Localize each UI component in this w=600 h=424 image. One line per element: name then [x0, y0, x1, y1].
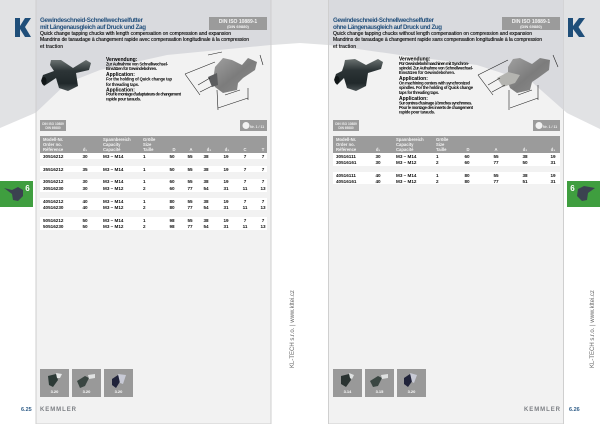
rows: left: 31	[223, 186, 229, 191]
rows: left	[43, 154, 266, 229]
rows: right: 40	[375, 179, 381, 184]
logo: right K	[568, 18, 585, 37]
subtitle: left: et traction	[40, 44, 63, 50]
rows: right: 19	[550, 154, 556, 159]
rows: left: M3 – M12	[103, 205, 124, 210]
rows: left: M3 – M14	[103, 154, 124, 159]
rows: left: M3 – M14	[103, 218, 124, 223]
standard badge: left	[209, 17, 267, 30]
table header: right: Taille	[436, 147, 447, 152]
buttons: left: DIN 69880	[45, 126, 61, 130]
accessory thumbnails: right: 3.14	[344, 389, 352, 394]
usage text: right	[399, 56, 474, 114]
rows: left: 80	[169, 205, 175, 210]
rows: left: 7	[244, 167, 247, 172]
buttons: right: DIN 69880	[338, 126, 354, 130]
rows: left: 1	[143, 167, 146, 172]
usage text: right: spindel. Zur Aufnahme von Schnellwechsel-	[399, 66, 474, 70]
rows: left: M3 – M14	[103, 167, 124, 172]
standard badge: right	[502, 17, 560, 30]
usage text: left: rapide pour tarauds.	[106, 96, 141, 102]
table header: right: d₂	[523, 147, 527, 152]
rows: left: 2	[143, 186, 146, 191]
table header: right: A	[494, 147, 498, 152]
table header: right: Größe	[436, 137, 449, 142]
background swoosh	[0, 0, 600, 129]
usage text: right: rapide pour tarauds.	[399, 110, 435, 114]
rows: left: 50	[169, 167, 175, 172]
rows: right: M3 – M14	[396, 154, 417, 159]
section tab: left: 6	[25, 184, 30, 193]
rows: right: 77	[493, 160, 499, 165]
usage text: left: Verwendung:	[106, 57, 138, 63]
rows: right: 30516161	[336, 160, 357, 165]
rows: left: 40	[82, 205, 88, 210]
accessory thumbnails: right: 3.15	[376, 389, 384, 394]
rows: right: M3 – M12	[396, 179, 417, 184]
rows: right: 40516161	[336, 179, 357, 184]
rows: left: 11	[243, 205, 248, 210]
rows: left: 54	[203, 224, 209, 229]
rows: right: 38	[522, 154, 528, 159]
usage text: left: Application:	[106, 72, 135, 78]
rows: left: M3 – M12	[103, 224, 124, 229]
rows: left: 13	[260, 224, 266, 229]
table header: left: D	[172, 147, 176, 152]
side text: right: KL-TECH s.r.o. | www.kltei.cz	[590, 290, 596, 368]
standard badge: left: (DIN 69880)	[227, 24, 250, 29]
rows: left: 30516212	[43, 179, 64, 184]
table header: left: Taille	[143, 147, 154, 152]
rows: left: 19	[223, 167, 229, 172]
buttons: right: Nr. 1 / 11	[543, 125, 557, 129]
section tab: right	[567, 181, 600, 207]
rows: left: 50	[169, 154, 175, 159]
table header: right: Référence	[336, 147, 357, 152]
rows: right: M3 – M14	[396, 173, 417, 178]
rows: right: 31	[550, 179, 556, 184]
rows: left: 1	[143, 218, 146, 223]
rows: right: 40516111	[336, 173, 356, 178]
rows: left: 2	[143, 224, 146, 229]
rows: left: 40516230	[43, 205, 64, 210]
rows: left: 30516212	[43, 154, 64, 159]
rows: left: M3 – M14	[103, 199, 124, 204]
accessory thumbnails: right	[333, 369, 426, 397]
rows: left: 7	[262, 179, 265, 184]
rows: right: M3 – M12	[396, 160, 417, 165]
table header: right: Modell-Nr.	[336, 137, 356, 142]
rows: right: 1	[436, 173, 439, 178]
table header: right: D	[466, 147, 470, 152]
table header: right: Size	[436, 142, 445, 147]
table header: left	[40, 136, 267, 153]
side text: left: KL-TECH s.r.o. | www.kltei.cz	[290, 290, 296, 368]
rows: left: 55	[187, 154, 193, 159]
table: right	[333, 136, 560, 184]
rows: left: 38	[203, 179, 209, 184]
accessory thumbnails: left: 3.20	[51, 389, 59, 394]
table header: left: Order no.	[43, 142, 62, 147]
rows: right	[336, 154, 556, 184]
heading: left: Gewindeschneid-Schnellwechselfutter	[40, 17, 144, 24]
table header: right: Capacité	[396, 147, 414, 152]
heading: right: ohne Längenausgleich auf Druck und Zug	[333, 24, 442, 31]
rows: left: 30	[82, 186, 88, 191]
table header: right	[333, 136, 560, 153]
table: left	[40, 136, 267, 230]
usage text: left: Application:	[106, 88, 135, 94]
rows: left: 50	[82, 224, 88, 229]
table header: left: C	[243, 147, 247, 152]
rows: right: 77	[493, 179, 499, 184]
rows: left: 13	[260, 186, 266, 191]
rows: left: 98	[169, 224, 175, 229]
usage text: left: Pour le montage d'adaptateurs de changement	[106, 92, 182, 96]
subtitle: left: Mandrins de taraudage à changement rapide avec compensation longitudinale à la compression	[40, 37, 249, 43]
panel: left page	[36, 0, 271, 424]
table header: left: Référence	[43, 147, 64, 152]
heading: right: Gewindeschneid-Schnellwechselfutter	[333, 17, 435, 24]
subtitle: left: Quick change tapping chucks with length compensation on compression and expansion	[40, 31, 231, 37]
accessory thumbnails: left: 3.20	[83, 389, 91, 394]
section tab: right: 6	[570, 184, 575, 193]
table header: right: Order no.	[336, 142, 355, 147]
rows: left: 54	[203, 186, 209, 191]
rows: right: 30	[375, 154, 381, 159]
accessory thumbnails: left: 3.20	[115, 389, 123, 394]
rows: left: 11	[243, 224, 248, 229]
subtitle: right: et traction	[333, 44, 356, 50]
rows: right: 50	[522, 160, 528, 165]
usage text: right: Application:	[399, 96, 428, 102]
section tab: left	[0, 181, 33, 207]
rows: left: 13	[260, 205, 266, 210]
rows: left: 2	[143, 205, 146, 210]
rows: left: 55	[187, 218, 193, 223]
table header: left: Spannbereich	[103, 137, 131, 142]
rows: left: 38	[203, 167, 209, 172]
table header: right: d₃	[551, 147, 555, 152]
buttons: left: DIN ISO 10889	[42, 122, 64, 126]
usage text: right: Sur centres d'usinage à broches synchrones.	[399, 100, 472, 106]
rows: right: 51	[522, 179, 528, 184]
usage text: left: for threading taps.	[106, 82, 139, 87]
rows: left: M3 – M12	[103, 186, 124, 191]
rows: left: 7	[244, 154, 247, 159]
page number: left: 6.25	[21, 407, 32, 413]
technical drawing: right	[478, 55, 558, 110]
subtitle: left	[40, 31, 249, 50]
rows: left: 19	[223, 179, 229, 184]
table header: left: A	[189, 147, 193, 152]
rows: left: 7	[244, 199, 247, 204]
subtitle: right: Mandrins de taraudage à changement rapide sans compensation longitudinale à la compression	[333, 37, 542, 43]
rows: right: 55	[493, 173, 499, 178]
technical drawing: left	[185, 52, 263, 110]
table header: left: d₃	[225, 147, 229, 152]
table header: left: d₁	[83, 147, 87, 152]
rows: left: 60	[169, 186, 175, 191]
buttons: left: Nr. 1 / 11	[250, 125, 264, 129]
logo: left K	[15, 18, 31, 37]
buttons: left	[40, 120, 267, 131]
rows: left: 40	[82, 199, 88, 204]
usage text: right: taps for threading taps.	[399, 90, 439, 95]
rows: left: 55	[187, 199, 193, 204]
standard badge: left: DIN ISO 10889-1	[219, 19, 257, 25]
rows: left: 50516230	[43, 224, 64, 229]
rows: right: 80	[464, 173, 470, 178]
page number: right: 6.26	[569, 407, 580, 413]
rows: left: 1	[143, 154, 146, 159]
table header: left: T	[262, 147, 265, 152]
heading: left	[40, 17, 146, 31]
table header: left: Größe	[143, 137, 156, 142]
usage text: right: Einsätzen für Gewindebohren.	[399, 70, 455, 75]
rows: right: 80	[464, 179, 470, 184]
footer brand: left: KEMMLER	[40, 407, 77, 413]
usage text: right: Pour le montage des inserts de changement	[399, 105, 474, 110]
rows: left: 38	[203, 199, 209, 204]
rows: left: 80	[169, 199, 175, 204]
rows: left: 35516212	[43, 167, 64, 172]
rows: left: 50	[82, 218, 88, 223]
rows: left: 77	[187, 186, 193, 191]
rows: left: 40516212	[43, 199, 64, 204]
usage text: right: Verwendung:	[399, 56, 431, 62]
rows: right: 55	[493, 154, 499, 159]
usage text: left: For the holding of Quick change tap	[106, 76, 172, 82]
standard badge: right: DIN ISO 10889-1	[512, 19, 550, 25]
rows: left: 1	[143, 179, 146, 184]
rows: right: 60	[464, 154, 470, 159]
rows: left: 30516230	[43, 186, 64, 191]
rows: right: 38	[522, 173, 528, 178]
rows: left: 77	[187, 224, 193, 229]
rows: left: 1	[143, 199, 146, 204]
rows: left: 35	[82, 167, 88, 172]
usage text: right: On machining centers with synchronized	[399, 80, 470, 86]
rows: left: 38	[203, 154, 209, 159]
table header: left: d₂	[207, 147, 211, 152]
rows: left: 50516212	[43, 218, 64, 223]
rows: right: 30	[375, 160, 381, 165]
table header: right: d₁	[376, 147, 380, 152]
table header: left: Size	[143, 142, 152, 147]
usage text: right: Für Gewindebohrmaschinen mit Synchron-	[399, 61, 470, 66]
accessory thumbnails: right: 3.20	[408, 389, 416, 394]
usage text: left	[106, 57, 182, 102]
rows: right: 31	[550, 160, 556, 165]
accessory thumbnails: left	[40, 369, 133, 397]
rows: left: M3 – M14	[103, 179, 124, 184]
usage text: left: Zur Aufnahme von Schnellwechsel-	[106, 62, 169, 66]
rows: left: 30	[82, 154, 88, 159]
rows: right: 1	[436, 154, 439, 159]
rows: right: 40	[375, 173, 381, 178]
rows: left: 7	[244, 218, 247, 223]
footer brand: right: KEMMLER	[524, 407, 561, 413]
rows: left: 55	[187, 167, 193, 172]
rows: left: 31	[223, 224, 229, 229]
rows: left: 38	[203, 218, 209, 223]
table header: left: Capacity	[103, 142, 121, 147]
rows: right: 2	[436, 179, 439, 184]
heading: left: mit Längenausgleich auf Druck und Zag	[40, 24, 146, 31]
rows: right: 2	[436, 160, 439, 165]
rows: left: 54	[203, 205, 209, 210]
subtitle: right	[333, 31, 542, 50]
rows: left: 7	[244, 179, 247, 184]
rows: left: 98	[169, 218, 175, 223]
buttons: right: DIN ISO 10889	[335, 122, 357, 126]
heading: right	[333, 17, 442, 31]
standard badge: right: (DIN 69880)	[520, 24, 543, 29]
rows: left: 7	[262, 199, 265, 204]
subtitle: right: Quick change tapping chucks without length compensation on compression and expansion	[333, 31, 532, 37]
table header: left: Capacité	[103, 147, 121, 152]
rows: left: 31	[223, 205, 229, 210]
buttons: right	[333, 120, 560, 131]
usage text: right: Application:	[399, 76, 428, 82]
rows: left: 19	[223, 218, 229, 223]
table header: right: Capacity	[396, 142, 414, 147]
table header: left: Modell-Nr.	[43, 137, 63, 142]
rows: left: 77	[187, 205, 193, 210]
rows: left: 19	[223, 199, 229, 204]
product photo: right	[334, 59, 383, 91]
rows: left: 60	[169, 179, 175, 184]
rows: right: 60	[464, 160, 470, 165]
rows: left: 7	[262, 154, 265, 159]
rows: left: 19	[223, 154, 229, 159]
rows: left: 30	[82, 179, 88, 184]
table header: right: Spannbereich	[396, 137, 424, 142]
rows: right: 30516111	[336, 154, 356, 159]
panel: right page	[328, 0, 564, 424]
rows: left: 11	[243, 186, 248, 191]
rows: left: 7	[262, 218, 265, 223]
rows: right: 19	[550, 173, 556, 178]
usage text: left: Einsätzen für Gewindebohren.	[106, 66, 157, 71]
rows: left: 7	[262, 167, 265, 172]
usage text: right: spindles. For the holding of Quick change	[399, 85, 474, 90]
product photo: left	[41, 60, 91, 91]
rows: left: 55	[187, 179, 193, 184]
